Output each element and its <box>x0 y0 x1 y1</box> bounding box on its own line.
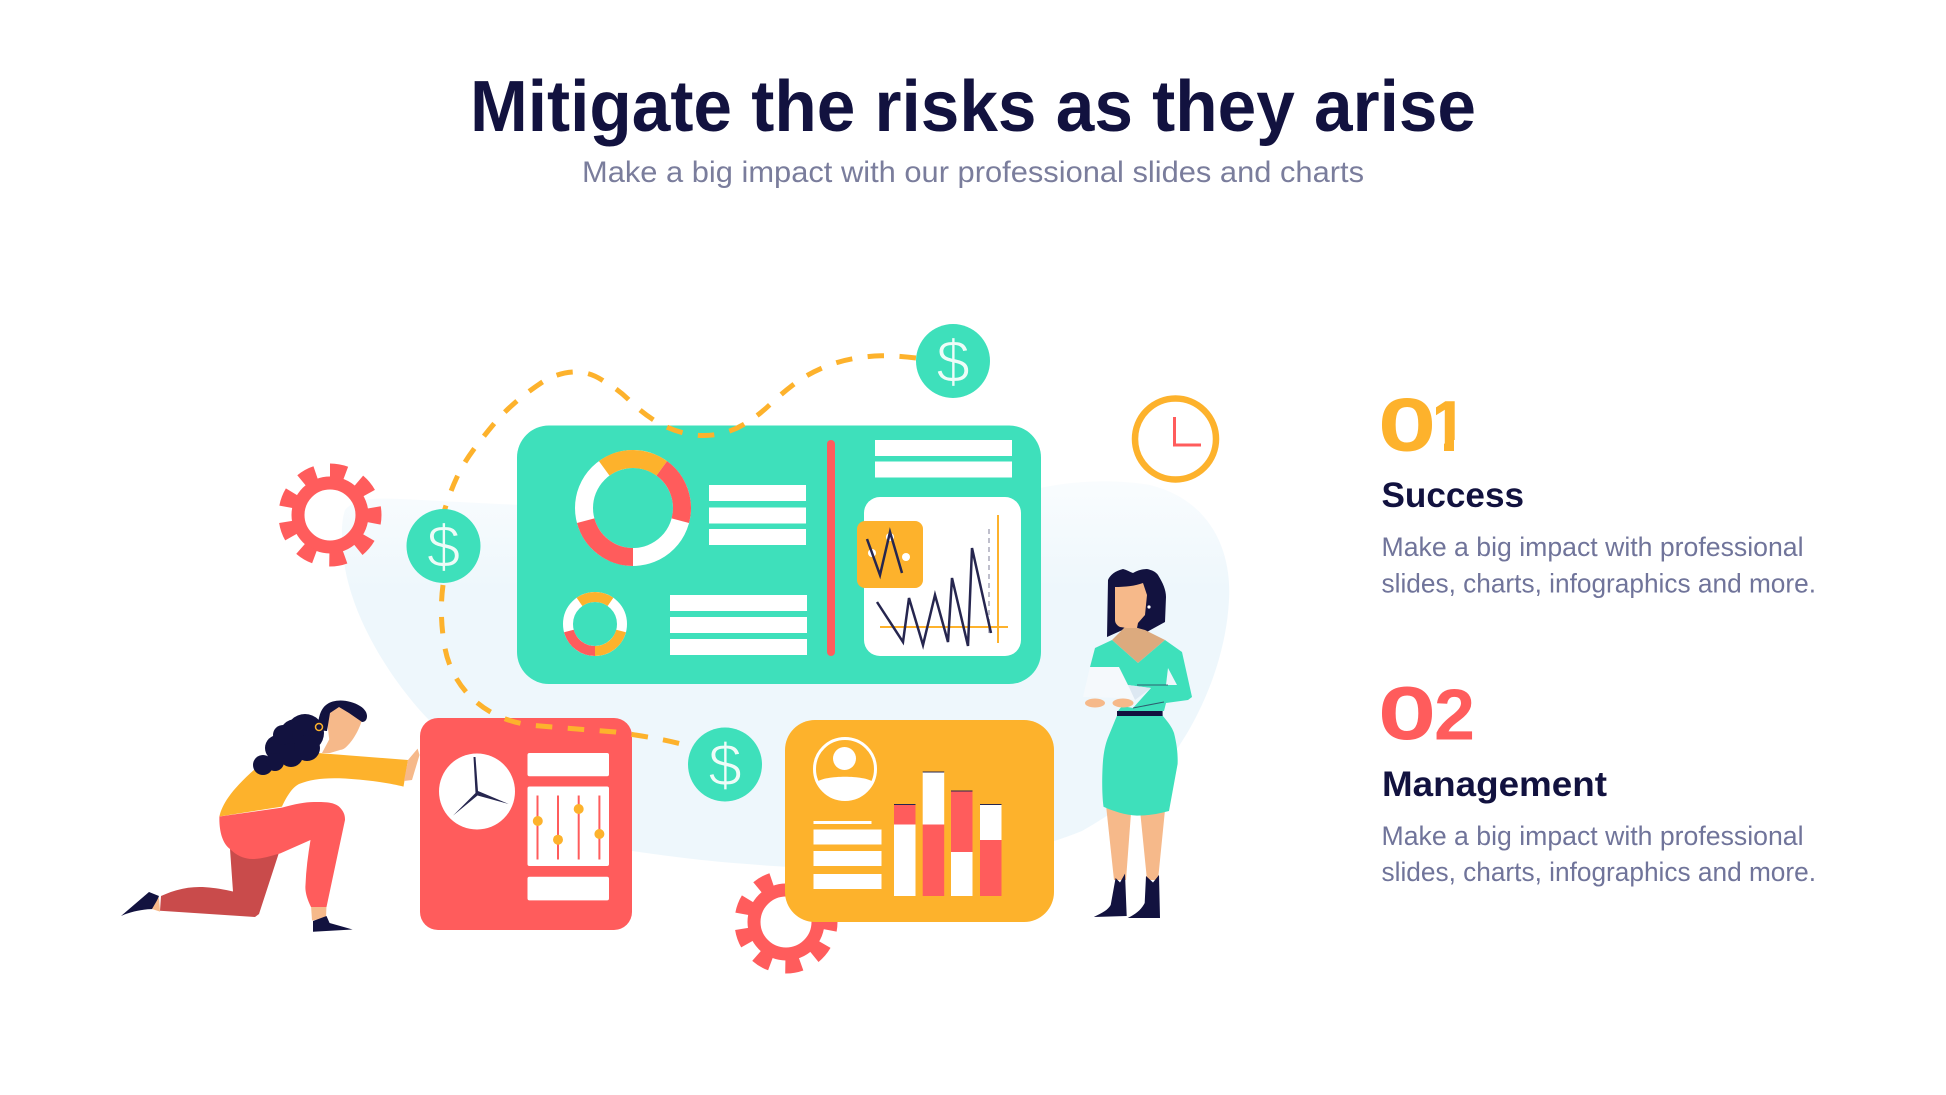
front leg <box>219 802 345 907</box>
icon: gear top left <box>286 470 374 560</box>
left leg <box>1106 805 1132 880</box>
paper shadow <box>1128 685 1151 700</box>
white line chart card <box>864 497 1021 656</box>
figure: kneeling woman pushing <box>121 701 420 932</box>
icon: dollar coin left: $ <box>427 513 460 580</box>
neck and chest <box>1112 625 1165 663</box>
dashed path: top coin to left coin <box>444 356 916 512</box>
dress top <box>1090 640 1192 711</box>
item 01 number <box>1382 398 1455 452</box>
figure: standing woman in teal dress <box>1083 569 1192 918</box>
item 02 description: Make a big impact with professional <box>1382 821 1804 851</box>
hands <box>1085 698 1105 708</box>
panel: yellow dashboard <box>785 720 1054 922</box>
item 01 heading: Success <box>1382 476 1524 515</box>
item 02 heading: Management <box>1382 765 1607 804</box>
profile text lines <box>814 821 882 889</box>
icon: dollar coin top <box>916 324 990 398</box>
hair tie <box>316 724 322 730</box>
avatar <box>814 738 876 800</box>
back leg <box>160 849 279 917</box>
panel: red dashboard <box>420 718 632 930</box>
hand <box>404 749 420 781</box>
icon: clock <box>1135 398 1216 480</box>
left boot <box>1094 874 1127 917</box>
red divider <box>827 440 835 656</box>
arm gap <box>1166 668 1177 685</box>
icon: dollar coin bottom: $ <box>708 732 742 798</box>
big donut text lines <box>709 485 806 545</box>
white top bar <box>528 753 609 776</box>
item 02 description: slides, charts, infographics and more. <box>1382 857 1816 887</box>
big donut chart <box>584 459 682 557</box>
top right text lines <box>875 440 1012 478</box>
front ankle and shoe <box>311 905 326 920</box>
curly hair <box>253 714 324 775</box>
right leg <box>1140 810 1165 880</box>
torso and arm <box>219 753 408 816</box>
small yellow chart card <box>857 521 923 588</box>
subtitle: Make a big impact with our professional slides and charts <box>582 156 1364 189</box>
icon: dollar coin bottom <box>688 728 762 802</box>
face <box>1115 583 1147 628</box>
belt <box>1117 711 1163 716</box>
white bottom bar <box>528 877 609 900</box>
small donut text lines <box>670 595 807 655</box>
arm crease lines <box>1133 685 1168 708</box>
small donut chart <box>568 597 622 651</box>
right boot <box>1128 875 1160 918</box>
back shoe <box>121 892 159 916</box>
icon: dollar coin left <box>406 509 480 583</box>
item 02 number <box>1381 674 1475 756</box>
item 01 description: slides, charts, infographics and more. <box>1382 568 1816 598</box>
hair <box>1107 569 1166 637</box>
background blob <box>342 481 1229 868</box>
top hair <box>318 701 367 731</box>
item 01 number: 1 <box>1428 387 1468 467</box>
panel: teal dashboard <box>517 426 1041 684</box>
earring <box>1147 605 1151 609</box>
icon: gear bottom <box>742 878 830 966</box>
face <box>326 704 362 750</box>
item 02 number: 2 <box>1434 676 1475 756</box>
item 01 number: 0 <box>1381 386 1433 464</box>
paper sheet <box>1083 667 1135 700</box>
item 02 number: 0 <box>1381 674 1433 752</box>
neck <box>322 738 340 753</box>
icon: dollar coin top: $ <box>936 328 970 395</box>
sliders <box>528 786 609 866</box>
bar chart <box>894 772 1002 896</box>
dashed path: left coin to bottom coin <box>441 585 692 747</box>
title: Mitigate the risks as they arise <box>470 67 1476 147</box>
item 01 description: Make a big impact with professional <box>1382 532 1804 562</box>
skirt <box>1102 716 1178 816</box>
clock dial <box>439 754 515 830</box>
